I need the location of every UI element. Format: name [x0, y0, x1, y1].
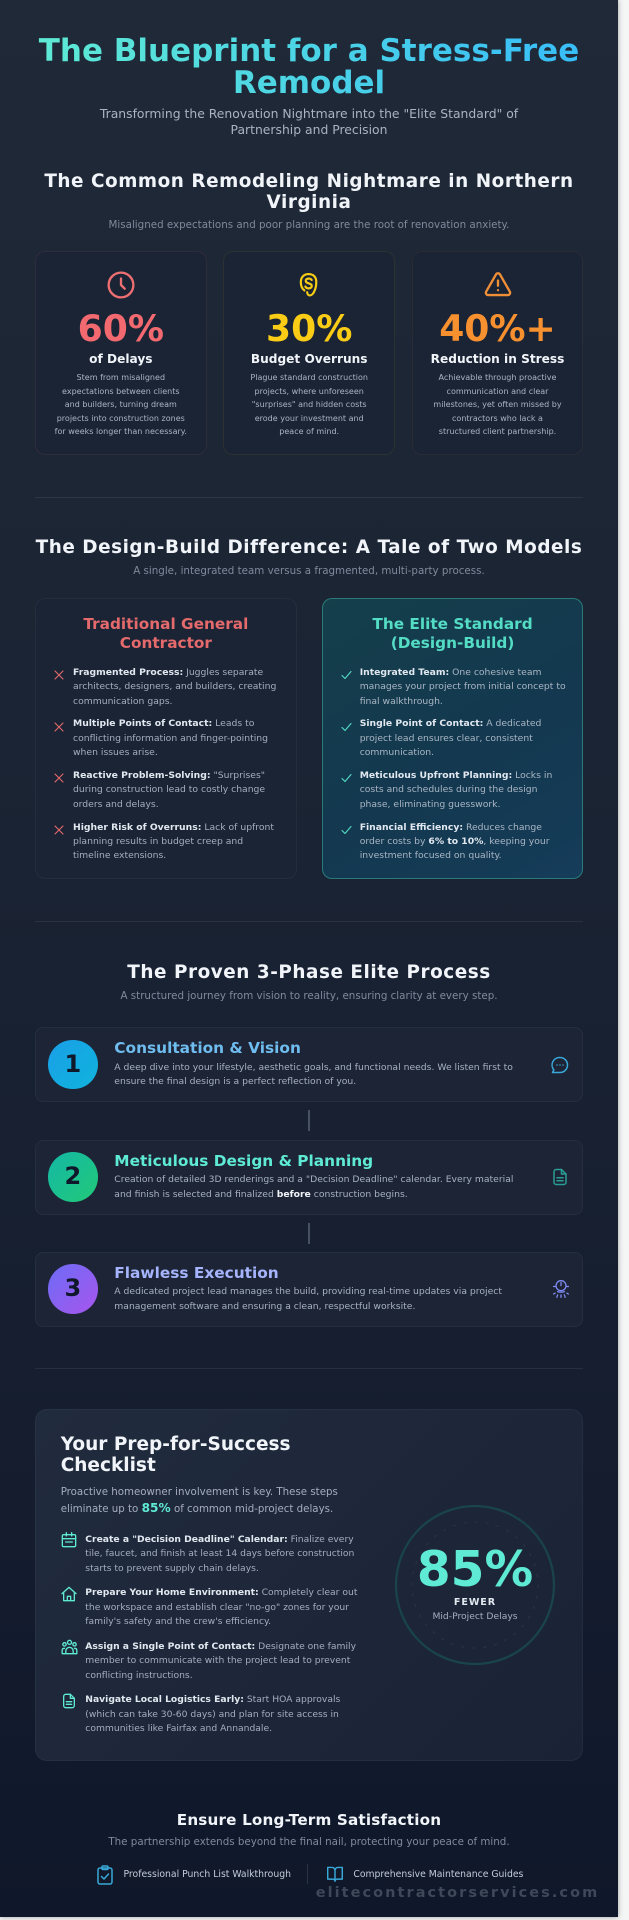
- item: assign single point of contact: conflicting instructions.: [85, 1670, 193, 1681]
- subtitle: Partnership and Precision: [231, 122, 387, 136]
- list item: integrated team: manages your project from initial concept to: [360, 681, 566, 692]
- item: assign single point of contact: Assign a Single Point of Contact: Designate one family: [85, 1641, 356, 1652]
- list item: multiple points of contact: Multiple Points of Contact: Leads to: [73, 718, 254, 729]
- checklist intro: [61, 1486, 338, 1515]
- item: prepare home environment: Prepare Your Home Environment: Completely clear out: [85, 1587, 357, 1598]
- checklist intro: eliminate up to 85% of common mid-project delays.: [61, 1501, 333, 1515]
- section subtitle: 3-phase process: A structured journey from vision to reality, ensuring clarity at every step.: [120, 990, 498, 1002]
- section subtitle: common nightmare: Misaligned expectations and poor planning are the root of renovation anxiety.: [109, 219, 509, 231]
- list item: single point of contact: Single Point of Contact: A dedicated: [360, 718, 541, 729]
- stat label: Budget Overruns: [251, 352, 368, 366]
- connector: [308, 1110, 310, 1131]
- footer vertical divider: [307, 1864, 308, 1884]
- icon: calendar: [62, 1532, 76, 1548]
- step description: [114, 1286, 502, 1312]
- icon: cross: [54, 670, 64, 680]
- stat description: expectations between clients: [62, 387, 180, 396]
- step description: and finish is selected and finalized before construction begins.: [114, 1189, 408, 1200]
- list item: multiple points of contact: [73, 718, 268, 758]
- heading: long-term satisfaction: Ensure Long-Term Satisfaction: [177, 1811, 441, 1829]
- stat number: 40%+: [439, 308, 556, 350]
- step description: ensure the final design is a perfect reflection of you.: [114, 1076, 356, 1087]
- item: prepare home environment: family's safety and the crew's efficiency.: [85, 1616, 271, 1627]
- stat description: and builders, turning dream: [65, 400, 177, 409]
- list item: reactive problem-solving: [73, 770, 265, 810]
- icon: open book: [326, 1866, 344, 1882]
- stat description: Achievable through proactive: [439, 373, 556, 382]
- list item: multiple points of contact: conflicting information and finger-pointing: [73, 733, 268, 744]
- list item: single point of contact: project lead ensures clear, consistent: [360, 733, 533, 744]
- item: decision deadline calendar: Create a "Decision Deadline" Calendar: Finalize every: [85, 1534, 354, 1545]
- panel heading: Traditional General: [83, 615, 248, 633]
- stat card: 40%+ reduction in stress: [412, 251, 583, 455]
- list item: financial efficiency: order costs by 6% to 10%, keeping your: [360, 836, 550, 847]
- list item: meticulous upfront planning: Meticulous Upfront Planning: Locks in: [360, 770, 552, 781]
- item: navigate local logistics: [85, 1693, 340, 1737]
- list item: single point of contact: communication.: [360, 747, 434, 758]
- list item: meticulous upfront planning: phase, eliminating guesswork.: [360, 799, 500, 810]
- stat description: communication and clear: [447, 387, 548, 396]
- big number: 85%: [417, 1542, 533, 1598]
- step description: [114, 1062, 513, 1087]
- list item: reactive problem-solving: orders and delays.: [73, 799, 159, 810]
- item: assign single point of contact: [85, 1641, 356, 1681]
- number badge 1: 1: [64, 1050, 81, 1078]
- icon: cross: [54, 825, 64, 835]
- list item: reactive problem-solving: during construction lead to costly change: [73, 784, 265, 795]
- list item: financial efficiency: Financial Efficiency: Reduces change: [360, 822, 542, 833]
- heading: common nightmare: The Common Remodeling Nightmare in Northern: [44, 171, 574, 192]
- heading: 3-phase process: The Proven 3-Phase Elite Process: [127, 962, 491, 983]
- list item: fragmented process: communication gaps.: [73, 696, 172, 707]
- number badge 3: [48, 1264, 98, 1314]
- stat description: [433, 373, 562, 436]
- footer item: maintenance guides: [326, 1864, 526, 1886]
- item: assign single point of contact: member to communicate with the project lead to prevent: [85, 1655, 350, 1666]
- stat number: 60%: [78, 308, 164, 350]
- list item: integrated team: [360, 667, 566, 707]
- stat description: projects, where unforeseen: [255, 387, 364, 396]
- list item: fragmented process: architects, designers, and builders, creating: [73, 681, 276, 692]
- panel heading: Contractor: [120, 634, 212, 652]
- list item: fragmented process: [73, 667, 276, 707]
- panel: the elite standard: [322, 598, 583, 879]
- step description: Creation of detailed 3D renderings and a "Decision Deadline" calendar. Every material: [114, 1174, 513, 1185]
- panel: traditional general contractor: [35, 598, 297, 879]
- list item: reactive problem-solving: Reactive Problem-Solving: "Surprises": [73, 770, 265, 781]
- list item: multiple points of contact: when issues arise.: [73, 747, 158, 758]
- stat description: peace of mind.: [279, 427, 339, 436]
- icon: cross: [54, 773, 64, 783]
- step description: [114, 1174, 513, 1200]
- label: Comprehensive Maintenance Guides: [353, 1869, 523, 1880]
- stat description: milestones, yet often missed by: [433, 400, 562, 409]
- icon: check: [342, 774, 352, 782]
- stat label: Reduction in Stress: [431, 352, 564, 366]
- item: navigate local logistics: (which can take 30-60 days) and plan for site access in: [85, 1709, 339, 1720]
- checklist heading: [60, 1434, 291, 1476]
- number badge 3: 3: [64, 1274, 81, 1302]
- item: decision deadline calendar: [85, 1534, 354, 1574]
- item: decision deadline calendar: tile, faucet, and finish at least 14 days before construction: [85, 1548, 354, 1559]
- list item: higher risk of overruns: timeline extensions.: [73, 850, 166, 861]
- list item: financial efficiency: investment focused on quality.: [360, 850, 502, 861]
- stat description: Stem from misaligned: [77, 373, 165, 382]
- stat description: Plague standard construction: [250, 373, 368, 382]
- step 2: meticulous design and planning: [35, 1140, 583, 1214]
- icon: warning triangle: [484, 272, 512, 296]
- item: navigate local logistics: Navigate Local Logistics Early: Start HOA approvals: [85, 1694, 340, 1705]
- list item: meticulous upfront planning: costs and schedules during the design: [360, 784, 537, 795]
- icon: document: [553, 1168, 567, 1186]
- footer item: punch list walkthrough: [97, 1864, 293, 1886]
- panel: prep-for-success checklist: [35, 1409, 583, 1761]
- icon: group of people: [62, 1640, 78, 1654]
- icon: check: [342, 722, 352, 732]
- panel heading: (Design-Build): [391, 634, 514, 652]
- step title: Consultation & Vision: [114, 1039, 301, 1057]
- title: [38, 35, 580, 101]
- icon: dollar: [300, 273, 318, 296]
- stat card: 60% of delays: [35, 251, 207, 455]
- stat description: for weeks longer than necessary.: [55, 427, 187, 436]
- stat description: "surprises" and hidden costs: [252, 400, 367, 409]
- title: Remodel: [233, 65, 385, 101]
- checklist heading: Your Prep-for-Success: [61, 1434, 291, 1455]
- icon: chat bubble: [551, 1056, 568, 1074]
- icon: clock: [108, 272, 134, 298]
- item: navigate local logistics: communities like Fairfax and Annandale.: [85, 1723, 272, 1734]
- step 3: flawless execution: [35, 1252, 583, 1326]
- step description: A deep dive into your lifestyle, aesthetic goals, and functional needs. We listen first to: [114, 1062, 513, 1073]
- subtitle: Transforming the Renovation Nightmare into the "Elite Standard" of: [100, 106, 518, 120]
- panel heading: [372, 615, 533, 652]
- number badge 2: [48, 1152, 98, 1202]
- number badge 2: 2: [64, 1162, 81, 1190]
- heading: design-build difference: The Design-Build Difference: A Tale of Two Models: [36, 537, 582, 558]
- icon: cross: [54, 722, 64, 732]
- item: decision deadline calendar: starts to prevent supply chain delays.: [85, 1563, 259, 1574]
- checklist heading: Checklist: [61, 1455, 156, 1476]
- list item: single point of contact: [360, 718, 541, 758]
- heading: common nightmare: Virginia: [267, 192, 351, 213]
- panel heading: The Elite Standard: [372, 615, 533, 633]
- stat description: structured client partnership.: [439, 427, 556, 436]
- list item: integrated team: Integrated Team: One cohesive team: [360, 667, 542, 678]
- heading: common nightmare: [44, 171, 574, 213]
- progress rings: [395, 1505, 555, 1665]
- stat description: projects into construction zones: [57, 414, 185, 423]
- stat card: 30% budget overruns: [223, 251, 395, 455]
- list item: financial efficiency: [360, 822, 550, 861]
- list item: higher risk of overruns: planning results in budget creep and: [73, 836, 243, 847]
- list item: higher risk of overruns: [73, 822, 274, 861]
- stat description: [54, 373, 187, 436]
- connector: [308, 1222, 310, 1244]
- item: prepare home environment: [85, 1587, 358, 1627]
- stat description: [250, 373, 368, 436]
- item: prepare home environment: the workspace and establish clear "no-go" zones for your: [85, 1602, 349, 1613]
- panel heading: [83, 615, 248, 652]
- subtitle: [100, 106, 518, 136]
- list item: fragmented process: Fragmented Process: Juggles separate: [73, 667, 263, 678]
- callout sublabel: Mid-Project Delays: [432, 1611, 518, 1622]
- stat number: 30%: [266, 308, 352, 350]
- icon: document: [61, 1693, 77, 1709]
- step description: A dedicated project lead manages the build, providing real-time updates via project: [114, 1286, 502, 1297]
- footer subtitle: The partnership extends beyond the final nail, protecting your peace of mind.: [108, 1836, 510, 1848]
- icon: clipboard check: [97, 1865, 113, 1885]
- step title: Flawless Execution: [114, 1264, 279, 1282]
- stat description: contractors who lack a: [452, 414, 543, 423]
- section subtitle: design-build difference: A single, integrated team versus a fragmented, multi-party process.: [133, 565, 485, 577]
- stat description: erode your investment and: [255, 414, 364, 423]
- step 1: consultation and vision: [35, 1027, 583, 1102]
- callout: 85% fewer delays: [395, 1505, 555, 1665]
- callout label: FEWER: [454, 1597, 496, 1608]
- number badge 1: [48, 1040, 98, 1089]
- step title: Meticulous Design & Planning: [114, 1152, 373, 1170]
- list item: higher risk of overruns: Higher Risk of Overruns: Lack of upfront: [73, 822, 274, 833]
- title: The Blueprint for a Stress-Free: [39, 33, 579, 69]
- list item: integrated team: final walkthrough.: [360, 696, 443, 707]
- step description: management software and ensuring a clean, respectful worksite.: [114, 1301, 415, 1312]
- label: Professional Punch List Walkthrough: [124, 1869, 291, 1880]
- stat label: of Delays: [89, 352, 152, 366]
- icon: check: [342, 826, 352, 834]
- icon: check: [342, 670, 352, 679]
- watermark: elitecontractorservices.com: [316, 1885, 599, 1901]
- list item: meticulous upfront planning: [360, 770, 552, 810]
- icon: hard hat / site lead: [552, 1280, 570, 1298]
- icon: house: [61, 1586, 77, 1602]
- checklist intro: Proactive homeowner involvement is key. These steps: [61, 1486, 338, 1498]
